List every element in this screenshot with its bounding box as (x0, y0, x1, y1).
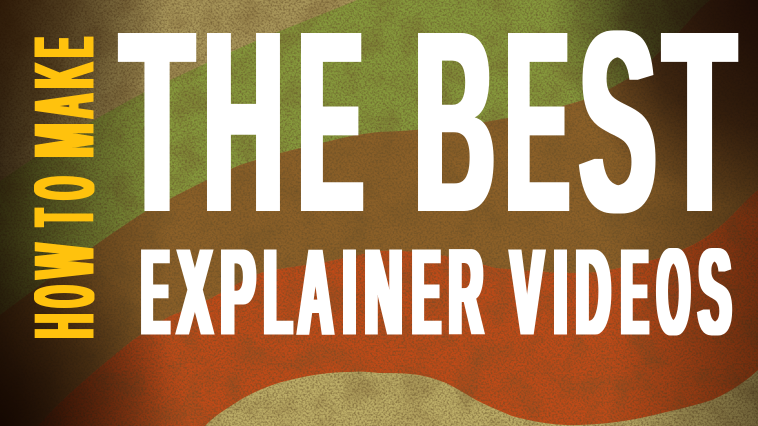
subheading: EXPLAINER VIDEOS: S (698, 223, 731, 361)
subheading: EXPLAINER VIDEOS: A (298, 223, 333, 361)
subheading: EXPLAINER VIDEOS: E (621, 224, 648, 362)
main heading: THE BEST (121, 0, 736, 267)
subheading: EXPLAINER VIDEOS: D (576, 223, 610, 361)
subheading: EXPLAINER VIDEOS: L (264, 223, 292, 361)
subheading: EXPLAINER VIDEOS: R (449, 222, 483, 361)
subheading: EXPLAINER VIDEOS: I (554, 223, 567, 361)
side heading: HOW TO MAKE: W (17, 244, 112, 278)
subheading: EXPLAINER VIDEOS: O (657, 223, 690, 361)
side heading: HOW TO MAKE: O (18, 286, 112, 307)
band: olive green (0, 0, 710, 315)
side heading: HOW TO MAKE: H (16, 314, 112, 338)
band: cream bottom (205, 370, 758, 426)
subheading: EXPLAINER VIDEOS: N (364, 224, 403, 362)
subheading: EXPLAINER VIDEOS: V (511, 223, 543, 361)
subheading: EXPLAINER VIDEOS: X (178, 224, 212, 362)
side heading: HOW TO MAKE: T (18, 209, 112, 226)
subheading: EXPLAINER VIDEOS: I (343, 223, 356, 361)
subheading: EXPLAINER VIDEOS (141, 222, 731, 362)
subheading: EXPLAINER VIDEOS: E (141, 224, 169, 361)
side heading: HOW TO MAKE: M (17, 123, 113, 158)
side heading: HOW TO MAKE (16, 37, 113, 338)
band: rust red (38, 190, 758, 426)
subheading: EXPLAINER VIDEOS: P (220, 224, 255, 362)
side heading: HOW TO MAKE: K (16, 63, 112, 88)
subheading: EXPLAINER VIDEOS: E (412, 224, 440, 361)
side heading: HOW TO MAKE: A (17, 94, 112, 118)
side heading: HOW TO MAKE: O (18, 177, 112, 199)
side heading: HOW TO MAKE: E (17, 37, 112, 57)
